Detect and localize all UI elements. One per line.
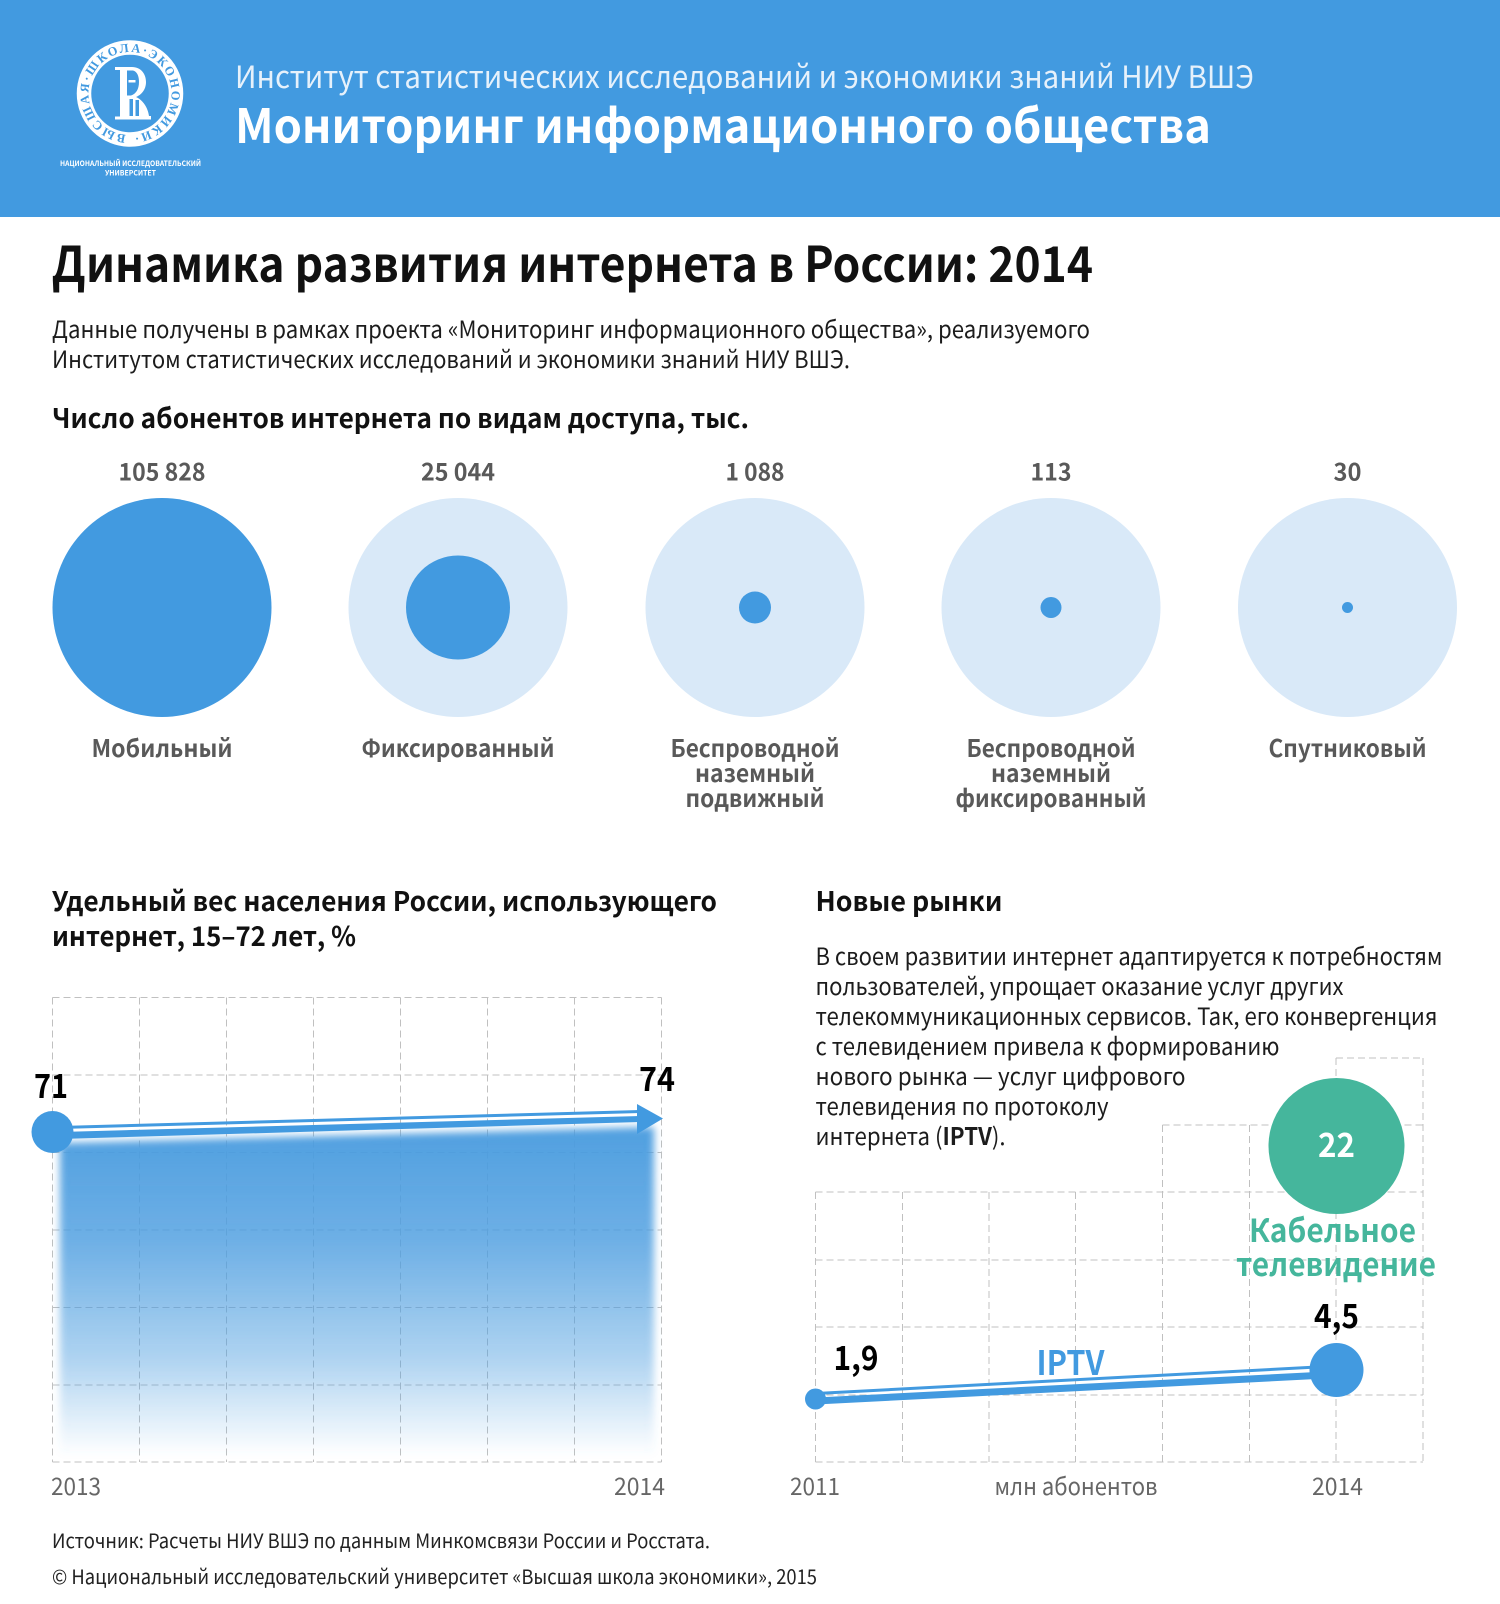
circle: wireless mobile: Беспроводной — [670, 729, 840, 764]
cable TV bubble — [1268, 1078, 1404, 1214]
intro text: Данные получены в рамках проекта «Мониторинг информационного общества», реализуемого — [52, 310, 1090, 345]
copyright: © Национальный исследовательский университет «Высшая школа экономики», 2015 — [52, 1561, 817, 1590]
cable TV bubble: 22 — [1318, 1119, 1355, 1167]
header band — [0, 0, 1500, 217]
circle: mobile: Мобильный — [92, 729, 232, 764]
circle: wireless fixed: наземный — [991, 754, 1111, 789]
circle: satellite: Спутниковый — [1268, 729, 1426, 764]
heading: new markets: Новые рынки — [816, 880, 1002, 919]
new markets text: телекоммуникационных сервисов. Так, его конвергенция — [816, 997, 1438, 1032]
cable TV label: телевидение — [1236, 1240, 1436, 1286]
new markets text: В своем развитии интернет адаптируется к потребностям — [816, 937, 1442, 972]
heading: share of population: интернет, 15–72 лет, % — [52, 915, 356, 954]
circle: mobile: 105 828 — [118, 452, 206, 488]
circle: wireless mobile: наземный — [695, 754, 815, 789]
new markets text: пользователей, упрощает оказание услуг других — [816, 967, 1344, 1002]
chart: new markets — [790, 1058, 1436, 1502]
header subtitle: Институт статистических исследований и экономики знаний НИУ ВШЭ — [235, 52, 1254, 97]
new markets text: нового рынка — услуг цифрового — [816, 1057, 1186, 1092]
panel: subscribers circles — [52, 452, 1457, 814]
year 2014: 2014 — [614, 1467, 665, 1502]
area fill — [60, 1127, 654, 1456]
main title: Динамика развития интернета в России: 2014 — [52, 226, 1093, 297]
heading: share of population — [52, 880, 717, 954]
cable TV label: Кабельное — [1249, 1206, 1416, 1252]
chart: internet population share — [32, 998, 675, 1502]
new markets text: интернета (IPTV). — [816, 1117, 1006, 1152]
circle: wireless mobile: 1 088 — [726, 452, 784, 488]
circle: satellite — [1238, 452, 1457, 764]
axis unit: млн абонентов — [994, 1467, 1158, 1502]
header title: Мониторинг информационного общества — [235, 88, 1211, 157]
year 2014: 2014 — [1312, 1467, 1363, 1502]
circle: satellite: 30 — [1334, 452, 1362, 488]
circle: fixed: Фиксированный — [362, 729, 554, 764]
logo: HSE emblem — [60, 40, 201, 178]
circle: wireless fixed — [942, 452, 1160, 814]
circle: wireless fixed: Беспроводной — [966, 729, 1136, 764]
IPTV line — [805, 1343, 1364, 1410]
heading: subscribers by access type: Число абонентов интернета по видам доступа, тыс. — [52, 397, 749, 436]
circle: fixed: 25 044 — [421, 452, 495, 488]
circle: wireless fixed: 113 — [1030, 452, 1072, 488]
source: Источник: Расчеты НИУ ВШЭ по данным Минкомсвязи России и Росстата. — [52, 1525, 710, 1554]
circle: wireless mobile: подвижный — [686, 779, 824, 814]
year 2013: 2013 — [51, 1467, 101, 1502]
logo: HSE emblem: ВЫСШАЯ·ШКОЛА·ЭКОНОМИКИ· — [80, 44, 180, 143]
label IPTV: IPTV — [1036, 1336, 1105, 1385]
value 74: 74 — [639, 1053, 675, 1101]
value 4,5: 4,5 — [1314, 1290, 1359, 1338]
circle: mobile — [52, 452, 272, 764]
intro text: Институтом статистических исследований и экономики знаний НИУ ВШЭ. — [52, 340, 850, 375]
circle: fixed — [348, 452, 568, 764]
circle: wireless fixed: фиксированный — [956, 779, 1146, 814]
year 2011: 2011 — [790, 1467, 840, 1502]
value 71: 71 — [34, 1060, 68, 1108]
new markets text: с телевидением привела к формированию — [816, 1027, 1280, 1062]
new markets text — [816, 937, 1442, 1152]
cable TV label — [1236, 1206, 1436, 1286]
heading: share of population: Удельный вес населения России, использующего — [52, 880, 717, 919]
logo: HSE emblem: УНИВЕРСИТЕТ — [105, 168, 156, 178]
circle: wireless mobile — [646, 452, 864, 814]
trend arrow — [32, 1104, 663, 1153]
value 1,9: 1,9 — [834, 1332, 878, 1380]
intro text — [52, 310, 1090, 375]
new markets text: телевидения по протоколу — [816, 1087, 1109, 1122]
logo: HSE emblem: НАЦИОНАЛЬНЫЙ ИССЛЕДОВАТЕЛЬСКИЙ — [60, 158, 201, 169]
